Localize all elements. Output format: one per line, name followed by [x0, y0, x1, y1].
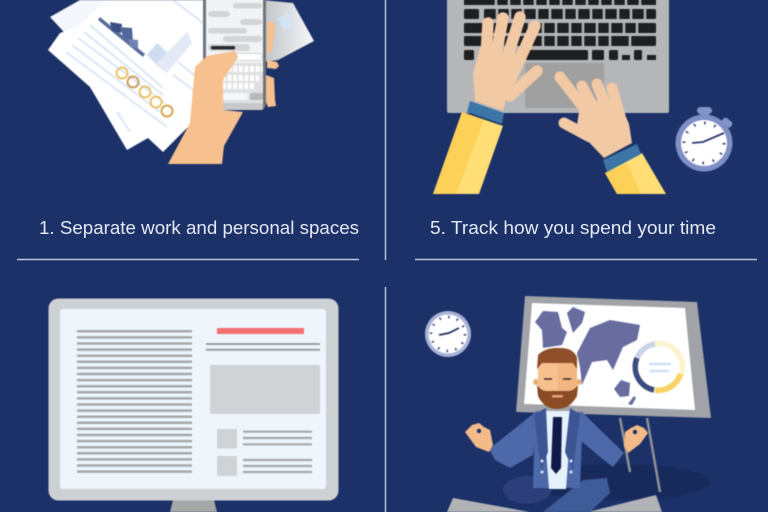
panel: monitor illustration	[48, 298, 338, 512]
left arm and hand	[433, 17, 537, 194]
right arm	[580, 413, 624, 467]
icon: stopwatch	[676, 107, 734, 172]
head	[533, 379, 539, 385]
rating circles	[116, 68, 172, 116]
article text lines	[77, 331, 192, 472]
meditation mat	[447, 495, 662, 512]
panel: track how you spend your time illustration	[433, 0, 734, 194]
torso	[533, 412, 583, 488]
panel: meditating businessman illustration	[425, 296, 711, 512]
donut chart	[635, 344, 682, 391]
panel: separate work and personal spaces illustration	[48, 0, 314, 164]
businessman	[465, 348, 648, 512]
bar chart	[98, 17, 192, 73]
caption: step 5: 5. Track how you spend your time	[430, 218, 716, 238]
world map	[535, 307, 640, 405]
document lines	[66, 0, 203, 132]
phone	[203, 0, 266, 110]
key gaps	[496, 0, 645, 46]
caption: step 1: 1. Separate work and personal spaces	[39, 218, 359, 238]
keyboard	[464, 0, 656, 60]
legs	[503, 476, 551, 504]
presentation board	[516, 296, 711, 492]
left arm	[489, 410, 538, 468]
hand holding phone	[168, 22, 279, 164]
icon: wall clock	[425, 311, 471, 357]
back paper sheets	[48, 0, 314, 152]
right arm and hand	[560, 77, 666, 194]
sidebar	[206, 328, 320, 476]
keyboard keys	[222, 69, 263, 86]
monitor frame	[48, 298, 338, 512]
floor shadow	[524, 464, 710, 500]
laptop	[447, 0, 669, 113]
hands	[465, 423, 648, 453]
